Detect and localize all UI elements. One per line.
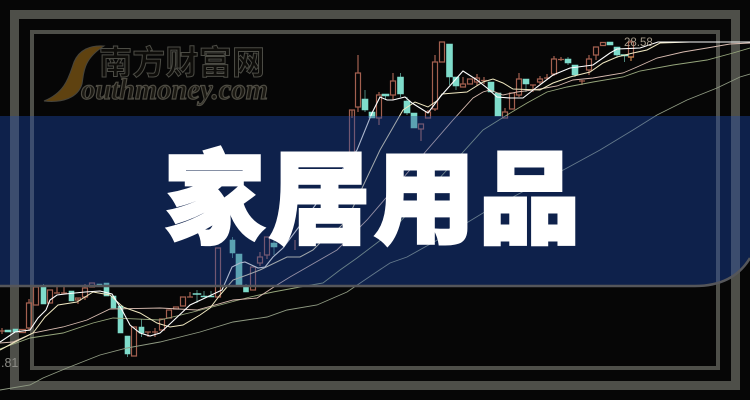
teal candles (5, 42, 628, 357)
orange wick (628, 57, 634, 61)
moving average: pink (0, 43, 750, 343)
icon: S swoosh (44, 46, 104, 101)
inner frame (32, 32, 718, 368)
moving average: white (0, 42, 750, 342)
chart label: low price: .81 (1, 356, 18, 370)
moving average: long term (0, 74, 750, 390)
moving average: pale yellow (0, 42, 750, 350)
watermark latin name: outhmoney.com (81, 73, 268, 106)
band colour (0, 116, 750, 286)
red candles (0, 40, 634, 356)
title band (0, 116, 750, 286)
watermark: southmoney logo (44, 44, 268, 106)
chart label: high price: 28.58 (624, 37, 653, 49)
moving average: green (0, 48, 750, 349)
band tint (0, 116, 750, 286)
watermark chinese name: 南方财富网 (99, 44, 265, 81)
title: 家居用品 (164, 145, 580, 257)
band edge (0, 258, 750, 286)
